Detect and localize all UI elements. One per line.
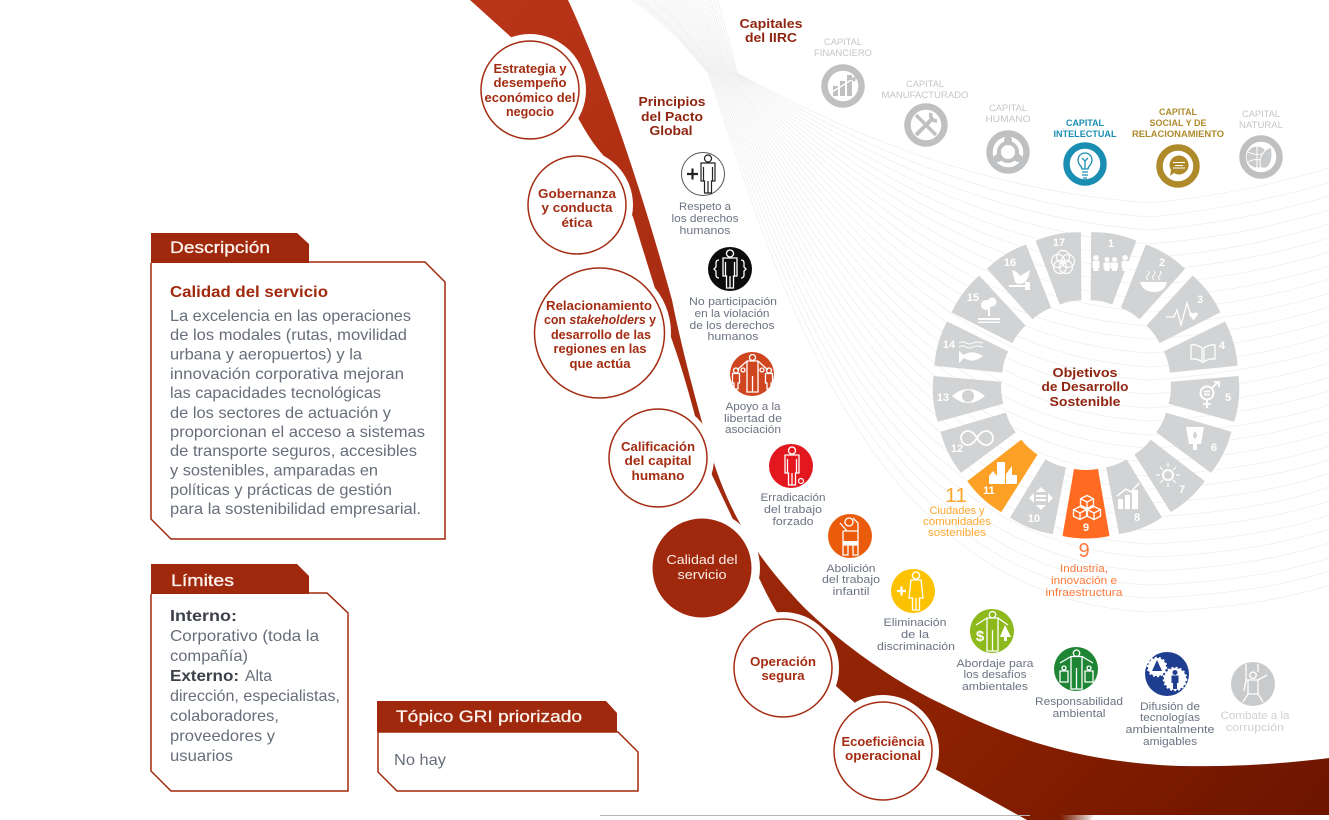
wheel numbers: 14 [943, 339, 956, 351]
principle 5: trabajo infantil: infantil [832, 586, 870, 598]
principle 7: desafíos ambientales: $ [976, 628, 985, 645]
panel: Descripción: La excelencia en las operaciones [170, 308, 411, 325]
principle 6: discriminación: Eliminación [884, 617, 946, 629]
principle 2: no violación: de los derechos [690, 320, 775, 332]
panel: Descripción: las capacidades tecnológicas [170, 385, 381, 402]
principle 8: responsabilidad ambiental [1035, 647, 1123, 720]
wheel numbers: 9 [1083, 522, 1089, 534]
panel: Límites: Externo: [170, 668, 239, 685]
principle 8: responsabilidad ambiental: Responsabilidad [1035, 696, 1123, 708]
heading: Capitales del IIRC: Capitales [740, 16, 802, 31]
panel: Límites: usuarios [170, 748, 233, 765]
panel: Descripción: de los modales (rutas, movilidad [170, 327, 407, 344]
panel: Límites: colaboradores, [170, 708, 279, 725]
capital: natural: NATURAL [1239, 120, 1283, 130]
topic: Calidad del servicio: servicio [678, 567, 726, 582]
principle 3: libertad de asociación: libertad de [724, 413, 782, 425]
capital: intelectual: INTELECTUAL [1054, 129, 1117, 139]
SDG 11 label [923, 485, 992, 539]
capital: humano: HUMANO [986, 114, 1030, 124]
panel: Límites: proveedores y [170, 728, 275, 745]
topic: Relacionamiento: Relacionamiento [546, 298, 652, 313]
capital: manufacturado: CAPITAL [906, 79, 944, 89]
principle 7: desafíos ambientales: ambientales [962, 681, 1029, 693]
topic: Operación segura: segura [762, 668, 805, 683]
panel: Límites: Corporativo (toda la [170, 628, 319, 645]
wheel numbers: 16 [1004, 257, 1016, 269]
principle 6: discriminación: de la [901, 629, 930, 641]
topic: Estrategia: desempeño [494, 75, 567, 90]
wheel numbers: 11 [983, 485, 995, 497]
topic: Relacionamiento: regiones en las [554, 341, 646, 356]
wheel numbers: 2 [1159, 257, 1165, 269]
principle 6: discriminación [877, 569, 955, 653]
wheel numbers: 13 [937, 392, 949, 404]
capital: financiero: CAPITAL [824, 37, 862, 47]
panel: Descripción [151, 233, 445, 539]
panel: Descripción: innovación corporativa mejoran [170, 366, 404, 383]
topic: Calidad del servicio: Calidad del [666, 552, 738, 567]
SDG 9 label: infraestructura [1046, 587, 1123, 599]
wheel segments [931, 230, 1241, 538]
topic: Gobernanza: Gobernanza [538, 186, 617, 201]
wheel numbers [937, 237, 1231, 534]
heading: Capitales del IIRC: del IIRC [745, 30, 798, 45]
topic: Calificación: humano [632, 468, 685, 483]
panel: Límites: Interno: [170, 608, 237, 625]
panel: Descripción: Calidad del servicio [170, 284, 328, 301]
capital: social y de relacionamiento [1132, 107, 1224, 184]
panel: Límites: compañía) [170, 648, 248, 665]
capital: financiero: FINANCIERO [814, 48, 872, 58]
panel: Límites: Alta [245, 668, 272, 685]
principle 9: tecnologías ambientales: ambientalmente [1126, 724, 1214, 736]
topic: Operación segura: Operación [750, 654, 816, 669]
wheel numbers: 5 [1225, 392, 1231, 404]
wheel numbers: 17 [1053, 237, 1065, 249]
panel: Descripción: de transporte seguros, accesibles [170, 443, 417, 460]
panel: Límites: dirección, especialistas, [170, 688, 340, 705]
principle 2: no violación: en la violación [694, 308, 770, 320]
SDG 9 label: 9 [1078, 540, 1090, 562]
capital: social y de relacionamiento: RELACIONAMIENTO [1132, 129, 1224, 139]
heading: Principios del Pacto Global: Global [650, 123, 692, 138]
topic: Gobernanza: ética [562, 215, 593, 230]
topic: Estrategia: negocio [506, 104, 554, 119]
wheel numbers: 7 [1179, 484, 1185, 496]
principle 9: tecnologías ambientales: tecnologías [1140, 712, 1201, 724]
wheel icons [952, 250, 1219, 520]
principle 8: responsabilidad ambiental: ambiental [1052, 708, 1106, 720]
topic: Operación segura [734, 619, 832, 717]
capital: social y de relacionamiento: SOCIAL Y DE [1150, 118, 1206, 128]
wheel numbers: 8 [1134, 512, 1140, 524]
principle 9: tecnologías ambientales: amigables [1143, 736, 1198, 748]
SDG 9 label: innovación e [1051, 575, 1117, 587]
principle 7: desafíos ambientales [956, 609, 1034, 693]
principle 1: derechos humanos: humanos [680, 225, 731, 237]
principle 7: desafíos ambientales: Abordaje para [956, 658, 1034, 670]
heading: Principios del Pacto Global [638, 94, 706, 138]
capital: intelectual: CAPITAL [1066, 118, 1104, 128]
wheel numbers: 3 [1197, 294, 1203, 306]
principle 4: trabajo forzado: forzado [772, 516, 814, 528]
principle 2: no violación: humanos [708, 331, 759, 343]
topic: Calificación [609, 409, 707, 507]
capital: financiero [814, 37, 872, 104]
topic: Estrategia: Estrategia y [494, 61, 567, 76]
material topics circles [474, 34, 939, 807]
topic: Relacionamiento [534, 268, 664, 398]
principle 3: libertad de asociación: asociación [725, 424, 781, 436]
topic: Calificación: Calificación [621, 439, 695, 454]
capital: natural: CAPITAL [1242, 109, 1280, 119]
panel: Descripción: de los sectores de actuación y [170, 405, 391, 422]
panel: Tópico GRI priorizado: Tópico GRI priorizado [396, 707, 582, 726]
wheel numbers: 1 [1108, 238, 1114, 250]
panel: Descripción: y sostenibles, amparadas en [170, 462, 378, 480]
panel: Límites: Límites [171, 571, 234, 590]
wheel numbers: 10 [1028, 513, 1040, 525]
panel: Tópico GRI priorizado [377, 701, 638, 791]
wheel centre title: Objetivos [1052, 365, 1118, 380]
principle 4: trabajo forzado [760, 444, 826, 528]
principle 10: corrupción: corrupción [1226, 722, 1284, 734]
principle 4: trabajo forzado: Erradicación [760, 492, 826, 504]
SDG 11 label: Ciudades y [930, 505, 985, 517]
capital: intelectual [1054, 118, 1117, 182]
heading: Capitales del IIRC [740, 16, 802, 45]
principle 9: tecnologías ambientales: Difusión de [1140, 701, 1200, 713]
capital: manufacturado [882, 79, 968, 144]
principle 7: desafíos ambientales: los desafíos [964, 669, 1027, 681]
principle 3: libertad de asociación: Apoyo a la [726, 401, 781, 413]
topic: Ecoeficiência [834, 702, 932, 800]
topic: Gobernanza [528, 156, 626, 254]
SDG 9 label [1046, 540, 1123, 599]
principle 2: no violación: No participación [689, 296, 777, 308]
capital: humano: CAPITAL [989, 103, 1027, 113]
topic: Estrategia: económico del [484, 90, 576, 105]
red swoosh band [470, 0, 1329, 820]
wheel centre title: de Desarrollo [1042, 379, 1129, 394]
principle 9: tecnologías ambientales [1126, 652, 1214, 748]
topic: Ecoeficiência: operacional [845, 748, 921, 763]
wheel numbers: 6 [1211, 442, 1217, 454]
wheel centre title [1042, 365, 1129, 409]
panel: Descripción: urbana y aeropuertos) y la [170, 346, 362, 364]
topic: Relacionamiento: que actúa [570, 356, 631, 371]
topic: Gobernanza: y conducta [542, 200, 613, 215]
bottom rule [600, 814, 1030, 816]
SDG 9 label: Industria, [1060, 563, 1108, 575]
SDG wheel [931, 230, 1241, 538]
panel: Tópico GRI priorizado: No hay [394, 752, 446, 769]
principle 10: corrupción [1220, 662, 1290, 734]
principle 2: no violación [689, 247, 777, 343]
topic: Ecoeficiência: Ecoeficiência [842, 734, 925, 749]
panel: Descripción: proporcionan el acceso a sistemas [170, 424, 425, 441]
topic: Calificación: del capital [624, 453, 692, 468]
panel: Descripción: políticas y prácticas de gestión [170, 482, 392, 499]
wheel centre title: Sostenible [1050, 394, 1120, 409]
topic: Estrategia [481, 41, 579, 139]
principle 1: derechos humanos: Respeto a [679, 201, 732, 213]
principle 5: trabajo infantil: Abolición [826, 563, 876, 575]
topic: Calidad del servicio [652, 518, 752, 618]
panel: Descripción: Descripción [170, 238, 270, 257]
wheel numbers: 4 [1219, 340, 1226, 352]
principle 4: trabajo forzado: del trabajo [764, 504, 822, 516]
principle 1: derechos humanos [672, 152, 739, 237]
panel: Límites [151, 564, 348, 791]
topic: Relacionamiento: desarrollo de las [551, 327, 651, 342]
SDG 11 label: sostenibles [928, 527, 987, 539]
SDG 11 label: comunidades [923, 516, 992, 528]
principle 5: trabajo infantil [822, 514, 880, 598]
capital: manufacturado: MANUFACTURADO [882, 90, 968, 100]
panel: Descripción: para la sostenibilidad empresarial. [170, 501, 421, 518]
principle 3: libertad de asociación [724, 352, 782, 436]
heading: Principios del Pacto Global: del Pacto [641, 109, 703, 124]
capital: social y de relacionamiento: CAPITAL [1159, 107, 1197, 117]
capital: natural [1239, 109, 1283, 176]
principle 5: trabajo infantil: del trabajo [822, 574, 880, 586]
wheel numbers: 15 [967, 292, 979, 304]
SDG 11 label: 11 [945, 485, 967, 507]
wheel numbers: 12 [951, 443, 963, 455]
principle 10: corrupción: Combate a la [1220, 710, 1290, 722]
capital: humano [986, 103, 1030, 170]
principle 1: derechos humanos: los derechos [672, 213, 739, 225]
principle 6: discriminación: discriminación [877, 641, 955, 653]
heading: Principios del Pacto Global: Principios [638, 94, 706, 109]
topic: Relacionamiento: con stakeholders y [544, 312, 657, 327]
